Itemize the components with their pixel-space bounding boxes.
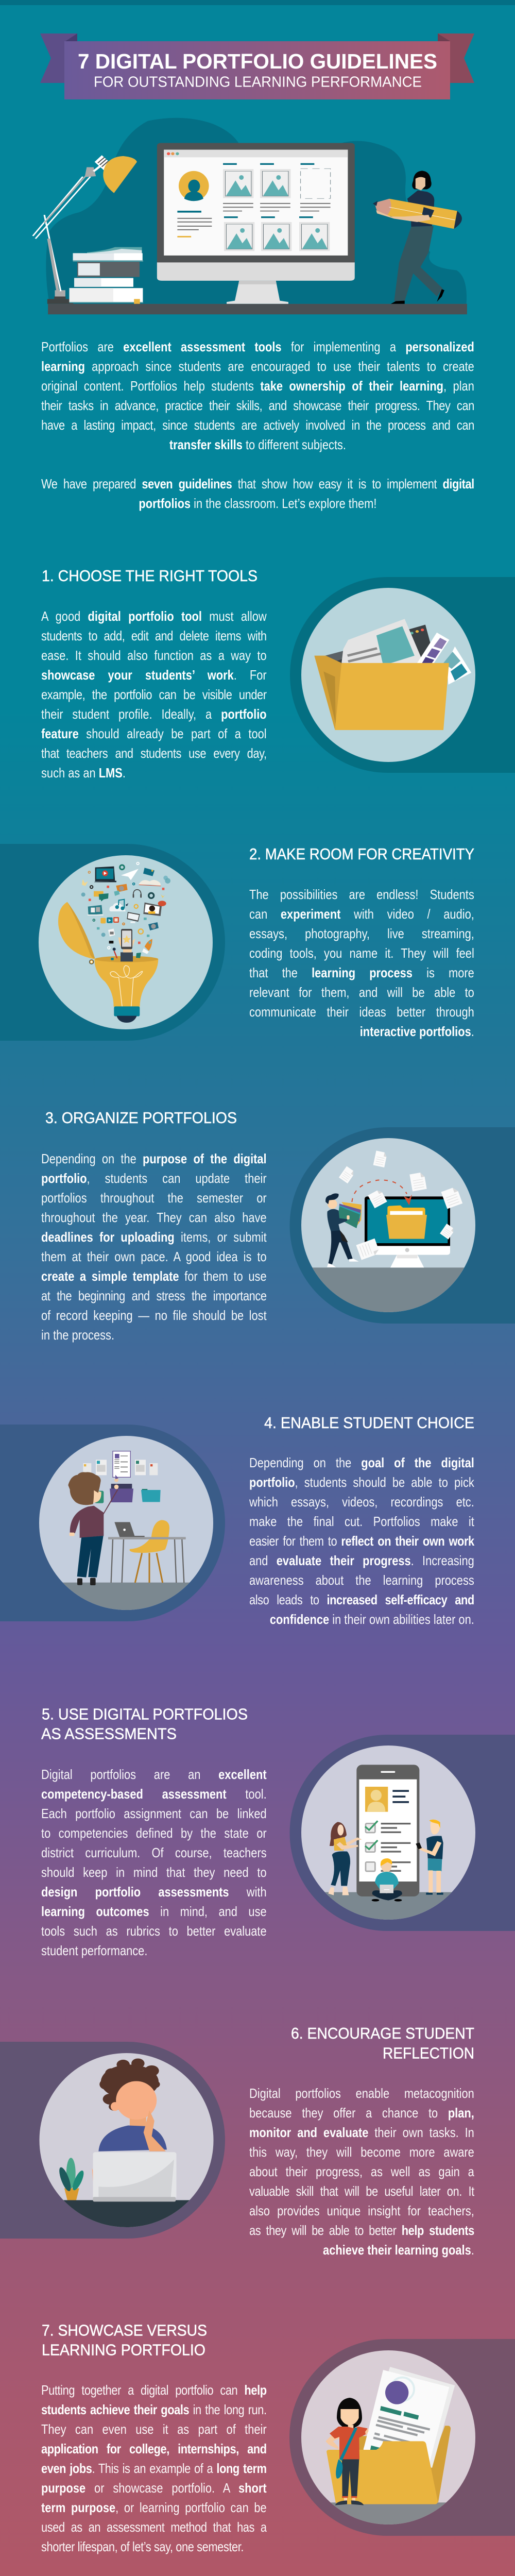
body text 1: showcase your students’ work. For [41, 667, 267, 683]
intro text: Portfolios are excellent assessment tools for implementing a personalized [41, 339, 474, 354]
body text 1: such as an LMS. [41, 765, 126, 781]
body text 6: Digital portfolios enable metacognition [249, 2086, 474, 2101]
panel 6 backdrop [0, 2042, 225, 2239]
intro text: seven guidelines [41, 476, 474, 511]
body text 2: The possibilities are endless! Students [249, 887, 474, 902]
heading 6: 6. ENCOURAGE STUDENT [291, 2024, 474, 2042]
body text 7: used as an assessment method that has a [41, 2519, 267, 2535]
body text 1 [41, 608, 267, 781]
body text 5: district curriculum. Of course, teachers [41, 1845, 267, 1860]
body text 3: portfolio, students can update their [41, 1171, 267, 1186]
body text 7: They can even use it as part of their [41, 2421, 267, 2437]
body text 6: also provides unique insight for teachers, [249, 2203, 474, 2218]
icon: thinking student at laptop [59, 2059, 190, 2227]
heading 2: 2. MAKE ROOM FOR CREATIVITY [249, 845, 474, 863]
intro text: original content. Portfolios help students take ownership of their learning, plan [41, 378, 474, 394]
body text 1: feature should already be part of a tool [41, 726, 267, 741]
heading 5 [41, 1705, 248, 1742]
body text 1: ease. It should also function as a way to [41, 648, 267, 663]
panel 1 circle [301, 588, 475, 762]
icon: man uploading folder to computer [312, 1150, 465, 1312]
body text 2: can experiment with video / audio, [249, 906, 474, 922]
body text 1: students to add, edit and delete items with [41, 628, 267, 643]
panel: 6 encourage student reflection [0, 2042, 230, 2239]
panel: 1 choose the right tools [290, 577, 515, 773]
body text 5: Digital portfolios are an excellent [41, 1767, 267, 1782]
body text 1: example, the portfolio can be visible under [41, 687, 267, 702]
icon: phone checklist with three students [325, 1765, 452, 1920]
intro text [41, 339, 474, 452]
icon: folder with documents [314, 619, 471, 730]
panel 7 circle [301, 2350, 475, 2524]
heading 5: 5. USE DIGITAL PORTFOLIOS [42, 1705, 248, 1723]
heading 5: AS ASSESSMENTS [41, 1725, 177, 1742]
panel: 3 organize portfolios [289, 1127, 515, 1324]
hero illustration [33, 118, 467, 314]
body text 5: Each portfolio assignment can be linked [41, 1806, 267, 1821]
body text 6 [249, 2086, 475, 2258]
monitor [157, 143, 355, 304]
body text 3: throughout the year. They can also have [41, 1210, 267, 1225]
body text 5: learning outcomes in mind, and use [41, 1904, 267, 1919]
body text 5: should keep in mind that they need to [41, 1865, 267, 1880]
panel 3 backdrop [289, 1127, 515, 1324]
panel 4 backdrop [0, 1425, 225, 1621]
heading 6: REFLECTION [383, 2044, 474, 2062]
intro text: seven guidelines: portfolios in the classroom. Let’s explore them! [139, 496, 376, 511]
body text 1: that teachers and students use every day, [41, 745, 267, 761]
panel: 2 make room for creativity [0, 844, 225, 1041]
body text 5: competency-based assessment tool. [41, 1786, 267, 1802]
body text 3: them at their own pace. A good idea is to [41, 1249, 267, 1264]
body text 1: A good digital portfolio tool must allow [41, 608, 267, 624]
body text 3: deadlines for uploading items, or submit [41, 1229, 267, 1245]
heading 1: 1. CHOOSE THE RIGHT TOOLS [42, 567, 258, 585]
stack of books [70, 247, 143, 306]
body text 3: Depending on the purpose of the digital [41, 1151, 267, 1166]
body text 4: awareness about the learning process [249, 1572, 474, 1588]
body text 2: relevant for them, and will be able to [249, 985, 474, 1000]
intro text: their tasks in advance, practice their skills, and showcase their progress. They can [41, 398, 474, 413]
body text 3: of record keeping — no file should be lost [41, 1308, 267, 1323]
panel 2 circle [39, 855, 213, 1029]
top band [0, 0, 515, 5]
body text 4: portfolio, students should be able to pick [249, 1475, 474, 1490]
body text 5 [41, 1767, 267, 1958]
icon: student choosing documents at wall [63, 1451, 190, 1610]
body text 7: students achieve their goals in the long run. [41, 2402, 267, 2417]
panel 7 backdrop [289, 2339, 515, 2536]
body text 4: easier for them to reflect on their own work [249, 1533, 474, 1549]
woman with pencil [373, 171, 462, 304]
body text 2: essays, photography, live streaming, [249, 926, 474, 941]
title banner [40, 33, 474, 99]
heading 3: 3. ORGANIZE PORTFOLIOS [45, 1109, 237, 1127]
body text 4: which essays, videos, recordings etc. [249, 1494, 474, 1510]
body text 3 [41, 1151, 267, 1343]
intro text: seven guidelines: We have prepared seven guidelines that show how easy it is to implement digital [41, 476, 474, 492]
body text 2: communicate their ideas better through [249, 1004, 474, 1020]
body text 4: also leads to increased self-efficacy and [249, 1592, 474, 1607]
icon: girl with large folder and resume [325, 2367, 455, 2524]
panel: 7 showcase versus learning portfolio [289, 2339, 515, 2536]
panel 2 backdrop [0, 844, 225, 1041]
panel 5 backdrop [289, 1735, 515, 1931]
intro text: have a lasting impact, since students are actively involved in the process and can [41, 417, 474, 433]
body text 6: because they offer a chance to plan, [249, 2105, 474, 2121]
body text 2: coding tools, you name it. They will feel [249, 945, 474, 961]
heading 7: 7. SHOWCASE VERSUS [42, 2321, 207, 2339]
body text 1: their student profile. Ideally, a portfolio [41, 706, 267, 722]
body text 2: interactive portfolios. [360, 1024, 474, 1039]
body text 2 [249, 887, 474, 1039]
panel 5 circle [301, 1745, 475, 1920]
body text 2: that the learning process is more [249, 965, 474, 980]
body text 7: purpose or showcase portfolio. A short [41, 2480, 267, 2496]
icon: lightbulb with media icons [58, 862, 170, 1023]
body text 5: student performance. [41, 1943, 147, 1958]
panel 1 backdrop [290, 577, 515, 773]
body text 7: term purpose, or learning portfolio can be [41, 2500, 267, 2515]
title text: 7 DIGITAL PORTFOLIO GUIDELINES [78, 49, 437, 73]
heading 7 [42, 2321, 207, 2359]
body text 6: as they will be able to better help students [249, 2223, 474, 2238]
body text 7: even jobs. This is an example of a long term [41, 2461, 267, 2476]
body text 4: make the final cut. Portfolios make it [249, 1514, 474, 1529]
body text 4: Depending on the goal of the digital [249, 1455, 474, 1470]
body text 6: valuable skill that will be useful later on. It [249, 2183, 474, 2199]
body text 6: this way, they will become more aware [249, 2144, 474, 2160]
heading 4: 4. ENABLE STUDENT CHOICE [264, 1414, 474, 1432]
panel: 5 use digital portfolios as assessments [289, 1735, 515, 1931]
body text 4: and evaluate their progress. Increasing [249, 1553, 474, 1568]
body text 5: tools such as rubrics to better evaluate [41, 1923, 267, 1939]
body text 3: in the process. [41, 1327, 114, 1343]
body text 4: confidence in their own abilities later on. [270, 1612, 474, 1627]
panel 6 circle [39, 2053, 213, 2227]
desk lamp [33, 155, 137, 304]
body text 3: portfolios throughout the semester or [41, 1190, 267, 1206]
shelf [48, 304, 467, 314]
body text 4 [249, 1455, 475, 1627]
body text 3: create a simple template for them to use [41, 1268, 267, 1284]
body text 5: to competencies defined by the state or [41, 1825, 267, 1841]
panel: 4 enable student choice [0, 1425, 225, 1621]
intro text: learning approach since students are encouraged to use their talents to create [41, 359, 474, 374]
body text 3: at the beginning and stress the importance [41, 1288, 267, 1303]
panel 3 circle [301, 1138, 475, 1312]
body text 6: about their progress, as well as gain a [249, 2164, 474, 2179]
body text 7: Putting together a digital portfolio can help [41, 2382, 267, 2398]
body text 6: achieve their learning goals. [323, 2242, 474, 2258]
subtitle text: FOR OUTSTANDING LEARNING PERFORMANCE [94, 74, 422, 91]
body text 5: design portfolio assessments with [41, 1884, 267, 1900]
intro text: transfer skills to different subjects. [169, 437, 346, 452]
body text 7 [41, 2382, 267, 2554]
hero background blob [46, 118, 467, 304]
panel 4 circle [39, 1436, 213, 1610]
body text 6: monitor and evaluate their own tasks. In [249, 2125, 474, 2140]
body text 7: shorter lifespan, of let’s say, one semester. [41, 2539, 244, 2554]
heading 6 [291, 2024, 474, 2062]
body text 7: application for college, internships, and [41, 2441, 267, 2456]
heading 7: LEARNING PORTFOLIO [42, 2341, 205, 2359]
